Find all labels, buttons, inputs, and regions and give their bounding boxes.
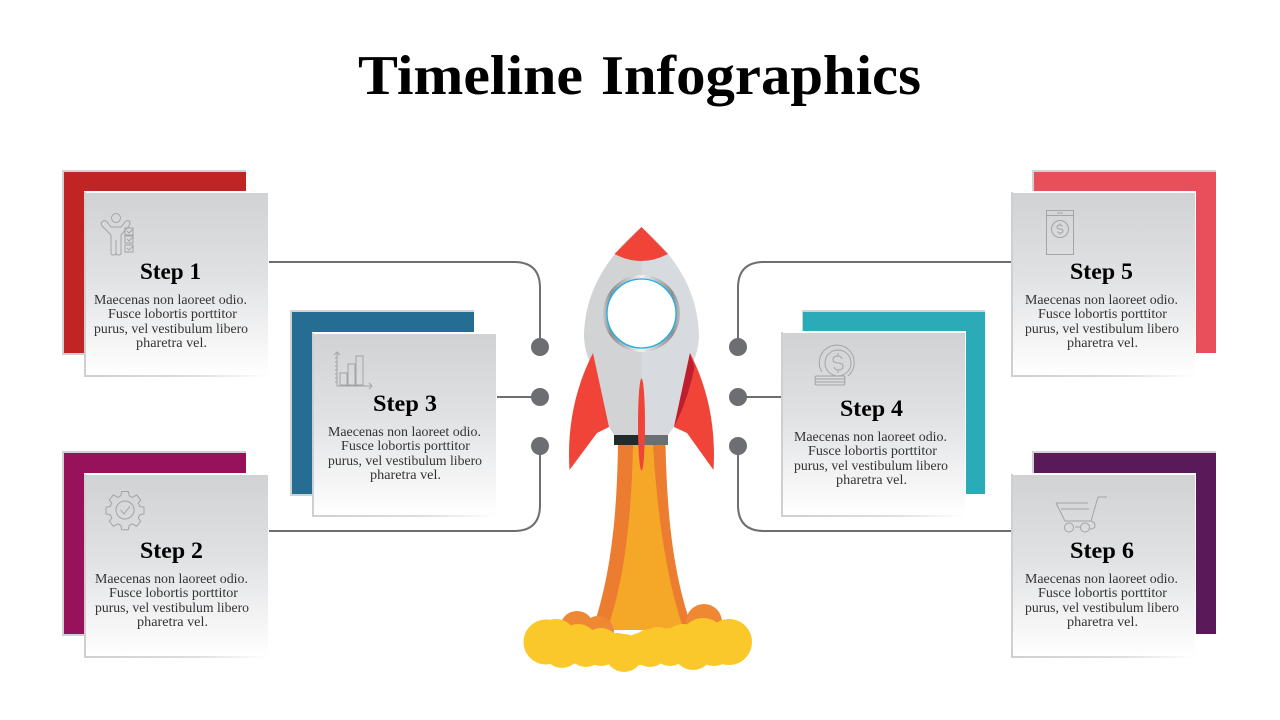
icon: bar chart (334, 352, 372, 389)
heading: step 6: Step 6 (1070, 538, 1134, 563)
text: step 5 description: purus, vel vestibulum libero (1025, 321, 1179, 336)
rocket base (614, 435, 668, 445)
rocket exhaust flame (594, 445, 691, 630)
heading: step 2: Step 2 (140, 538, 203, 563)
porthole window (603, 275, 680, 352)
heading: step 3: Step 3 (373, 391, 437, 416)
text: step 3 description: purus, vel vestibulum libero (328, 453, 482, 468)
nose cone (614, 227, 668, 261)
text: step 1 description: Maecenas non laoreet odio. (94, 292, 247, 307)
text: step 5 description (1025, 292, 1179, 350)
text: step 4 description: pharetra vel. (836, 472, 907, 487)
heading: step 5: Step 5 (1070, 259, 1133, 284)
panel: step 2 (62, 451, 269, 658)
text: step 2 description: Maecenas non laoreet odio. (95, 571, 248, 586)
panel: step 5 (1011, 170, 1216, 377)
text: step 2 description: pharetra vel. (137, 614, 208, 629)
text: step 6 description: pharetra vel. (1067, 614, 1138, 629)
text: step 2 description: Fusce lobortis porttitor (109, 585, 239, 600)
text: step 5 description: Maecenas non laoreet odio. (1025, 292, 1178, 307)
text: step 4 description (794, 429, 948, 487)
rocket fins (569, 353, 714, 470)
title (358, 45, 921, 107)
title: Infographics (601, 45, 921, 107)
icon: rocket launching (524, 227, 752, 672)
rocket body (584, 227, 699, 435)
smoke cloud (524, 604, 752, 672)
icon: gear with check (106, 492, 144, 530)
icon: person with checklist (101, 214, 133, 255)
heading: step 4: Step 4 (840, 396, 904, 421)
title: Timeline (358, 45, 583, 107)
text: step 1 description: purus, vel vestibulum libero (94, 321, 248, 336)
text: step 4 description: purus, vel vestibulum libero (794, 458, 948, 473)
text: step 3 description: Maecenas non laoreet odio. (328, 424, 481, 439)
text: step 6 description: Fusce lobortis porttitor (1038, 585, 1168, 600)
text: step 5 description: Fusce lobortis porttitor (1038, 306, 1168, 321)
text: step 5 description: pharetra vel. (1067, 335, 1138, 350)
centre fin (638, 378, 645, 470)
icon: shopping cart (1056, 497, 1107, 532)
heading: step 1: Step 1 (140, 259, 201, 284)
icon: dollar coins (815, 345, 854, 385)
text: step 3 description (328, 424, 482, 482)
text: step 1 description (94, 292, 248, 350)
icon: phone with dollar (1046, 210, 1074, 254)
panel: step 6 (1011, 451, 1216, 658)
text: step 1 description: pharetra vel. (136, 335, 207, 350)
text: step 3 description: Fusce lobortis porttitor (341, 438, 471, 453)
text: step 6 description: purus, vel vestibulum libero (1025, 600, 1179, 615)
text: step 2 description (95, 571, 249, 629)
text: step 6 description: Maecenas non laoreet odio. (1025, 571, 1178, 586)
connector lines (268, 262, 1011, 531)
panel: step 4 (781, 310, 985, 517)
panel: step 1 (62, 170, 269, 377)
text: step 1 description: Fusce lobortis porttitor (108, 306, 238, 321)
text: step 2 description: purus, vel vestibulum libero (95, 600, 249, 615)
text: step 4 description: Maecenas non laoreet odio. (794, 429, 947, 444)
text: step 3 description: pharetra vel. (370, 467, 441, 482)
text: step 4 description: Fusce lobortis porttitor (808, 443, 938, 458)
fin shadow (674, 353, 694, 427)
panel: step 3 (290, 310, 497, 517)
text: step 6 description (1025, 571, 1179, 629)
